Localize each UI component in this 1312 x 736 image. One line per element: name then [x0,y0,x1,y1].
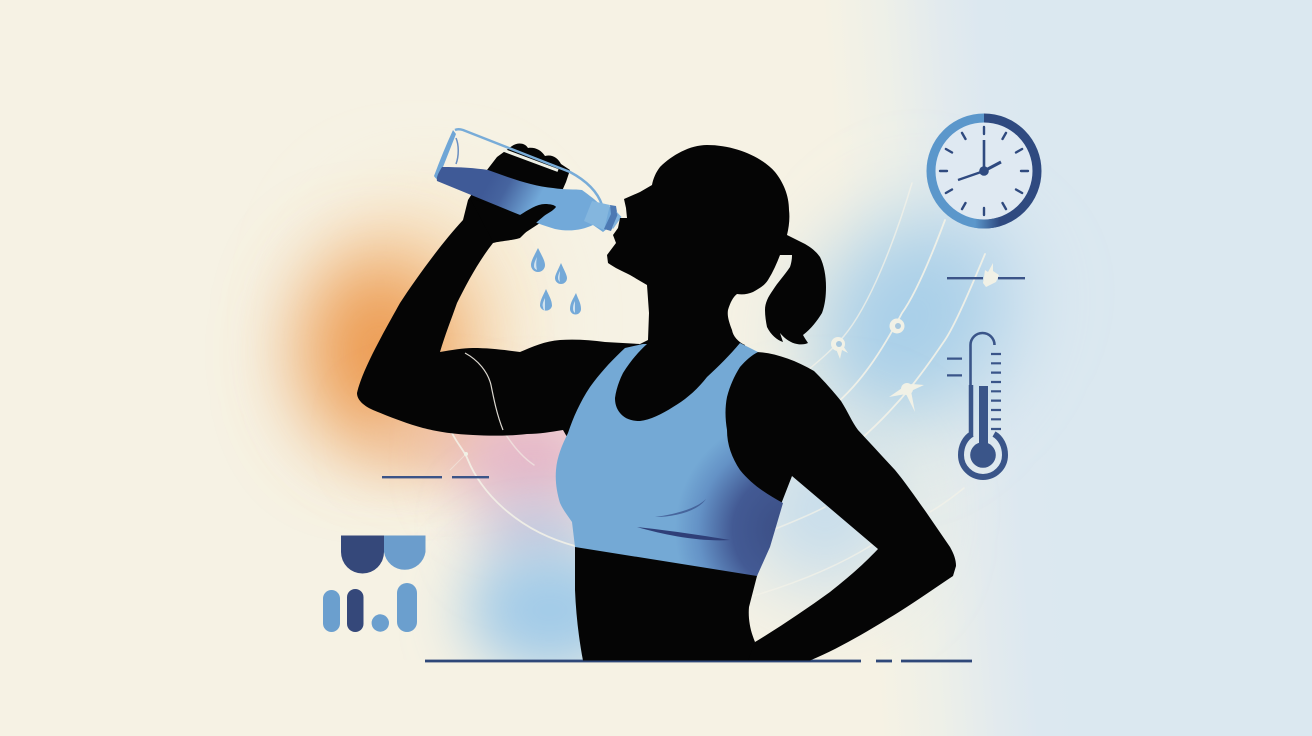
flow curves behind the body [450,183,985,596]
thumb over bottle [470,198,556,241]
icon: abstract shapes bar chart [323,536,426,632]
water drops [531,248,581,314]
sparkle nodes on the curves [464,263,999,456]
icon: thermometer [947,333,1005,477]
arm line [465,353,503,430]
baseline [425,660,972,662]
arm on hip [700,350,956,660]
silhouette: woman [357,129,956,660]
raised arm [357,144,640,437]
icon: clock [931,118,1037,224]
lower torso [575,545,760,660]
horizontal marker lines [382,277,1025,478]
head and neck [605,145,826,430]
bottle [434,129,622,232]
sports top [556,343,783,576]
